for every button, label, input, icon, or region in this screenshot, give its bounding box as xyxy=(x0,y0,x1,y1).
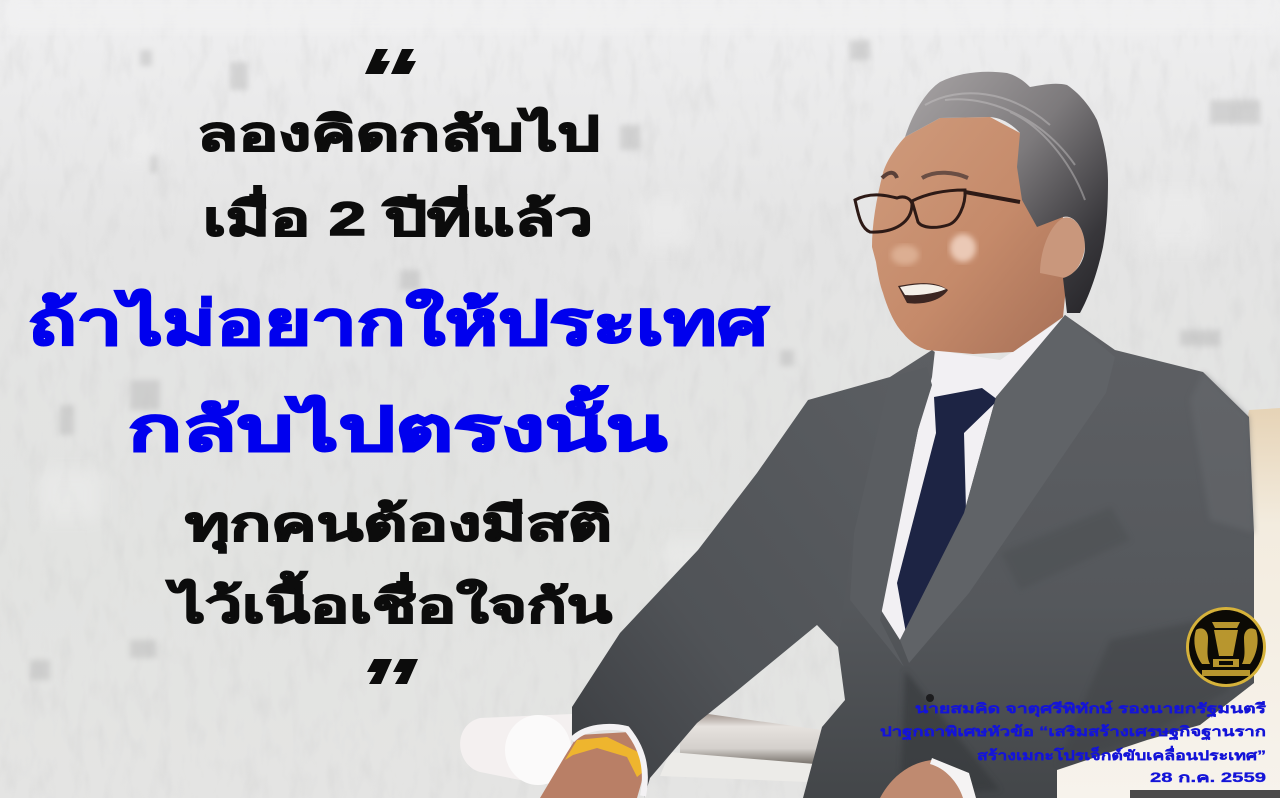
attribution: date: 28 ก.ค. 2559 xyxy=(1150,770,1266,785)
man: glasses xyxy=(855,190,1020,232)
quote line 5: ทุกคนต้องมีสติ xyxy=(185,497,612,553)
man: smile xyxy=(898,283,948,304)
government seal xyxy=(1186,607,1266,687)
man: head and neck xyxy=(872,117,1085,354)
man: jacket lapels xyxy=(850,315,1115,667)
man: shirt xyxy=(881,317,1065,640)
attribution: speech title line 1: ปาฐกถาพิเศษหัวข้อ “เสริมสร้างเศรษฐกิจฐานราก xyxy=(880,724,1266,741)
quote line 4, blue emphasis: กลับไปตรงนั้น xyxy=(128,385,667,463)
attribution: speaker name: นายสมคิด จาตุศรีพิทักษ์ รองนายกรัฐมนตรี xyxy=(915,700,1267,718)
chair: left arm rest xyxy=(460,710,822,785)
chair: right back and arm xyxy=(1057,408,1280,798)
quote line 2: เมื่อ 2 ปีที่แล้ว xyxy=(203,185,593,245)
man: right hand and cuff xyxy=(880,694,976,798)
quote line 6: ไว้เนื้อเชื่อใจกัน xyxy=(165,571,612,632)
man: necktie xyxy=(897,388,998,650)
closing quotation mark xyxy=(367,659,418,684)
quote line 1: ลองคิดกลับไป xyxy=(197,106,600,160)
man: suit jacket xyxy=(572,315,1254,798)
opening quotation mark xyxy=(365,49,416,74)
attribution: speech title line 2: สร้างเมกะโปรเจ็กต์ขับเคลื่อนประเทศ” xyxy=(977,745,1266,763)
man: hair xyxy=(905,72,1108,313)
man: left hand with wristband xyxy=(540,732,645,798)
quote line 3, blue emphasis: ถ้าไม่อยากให้ประเทศ xyxy=(28,288,769,357)
